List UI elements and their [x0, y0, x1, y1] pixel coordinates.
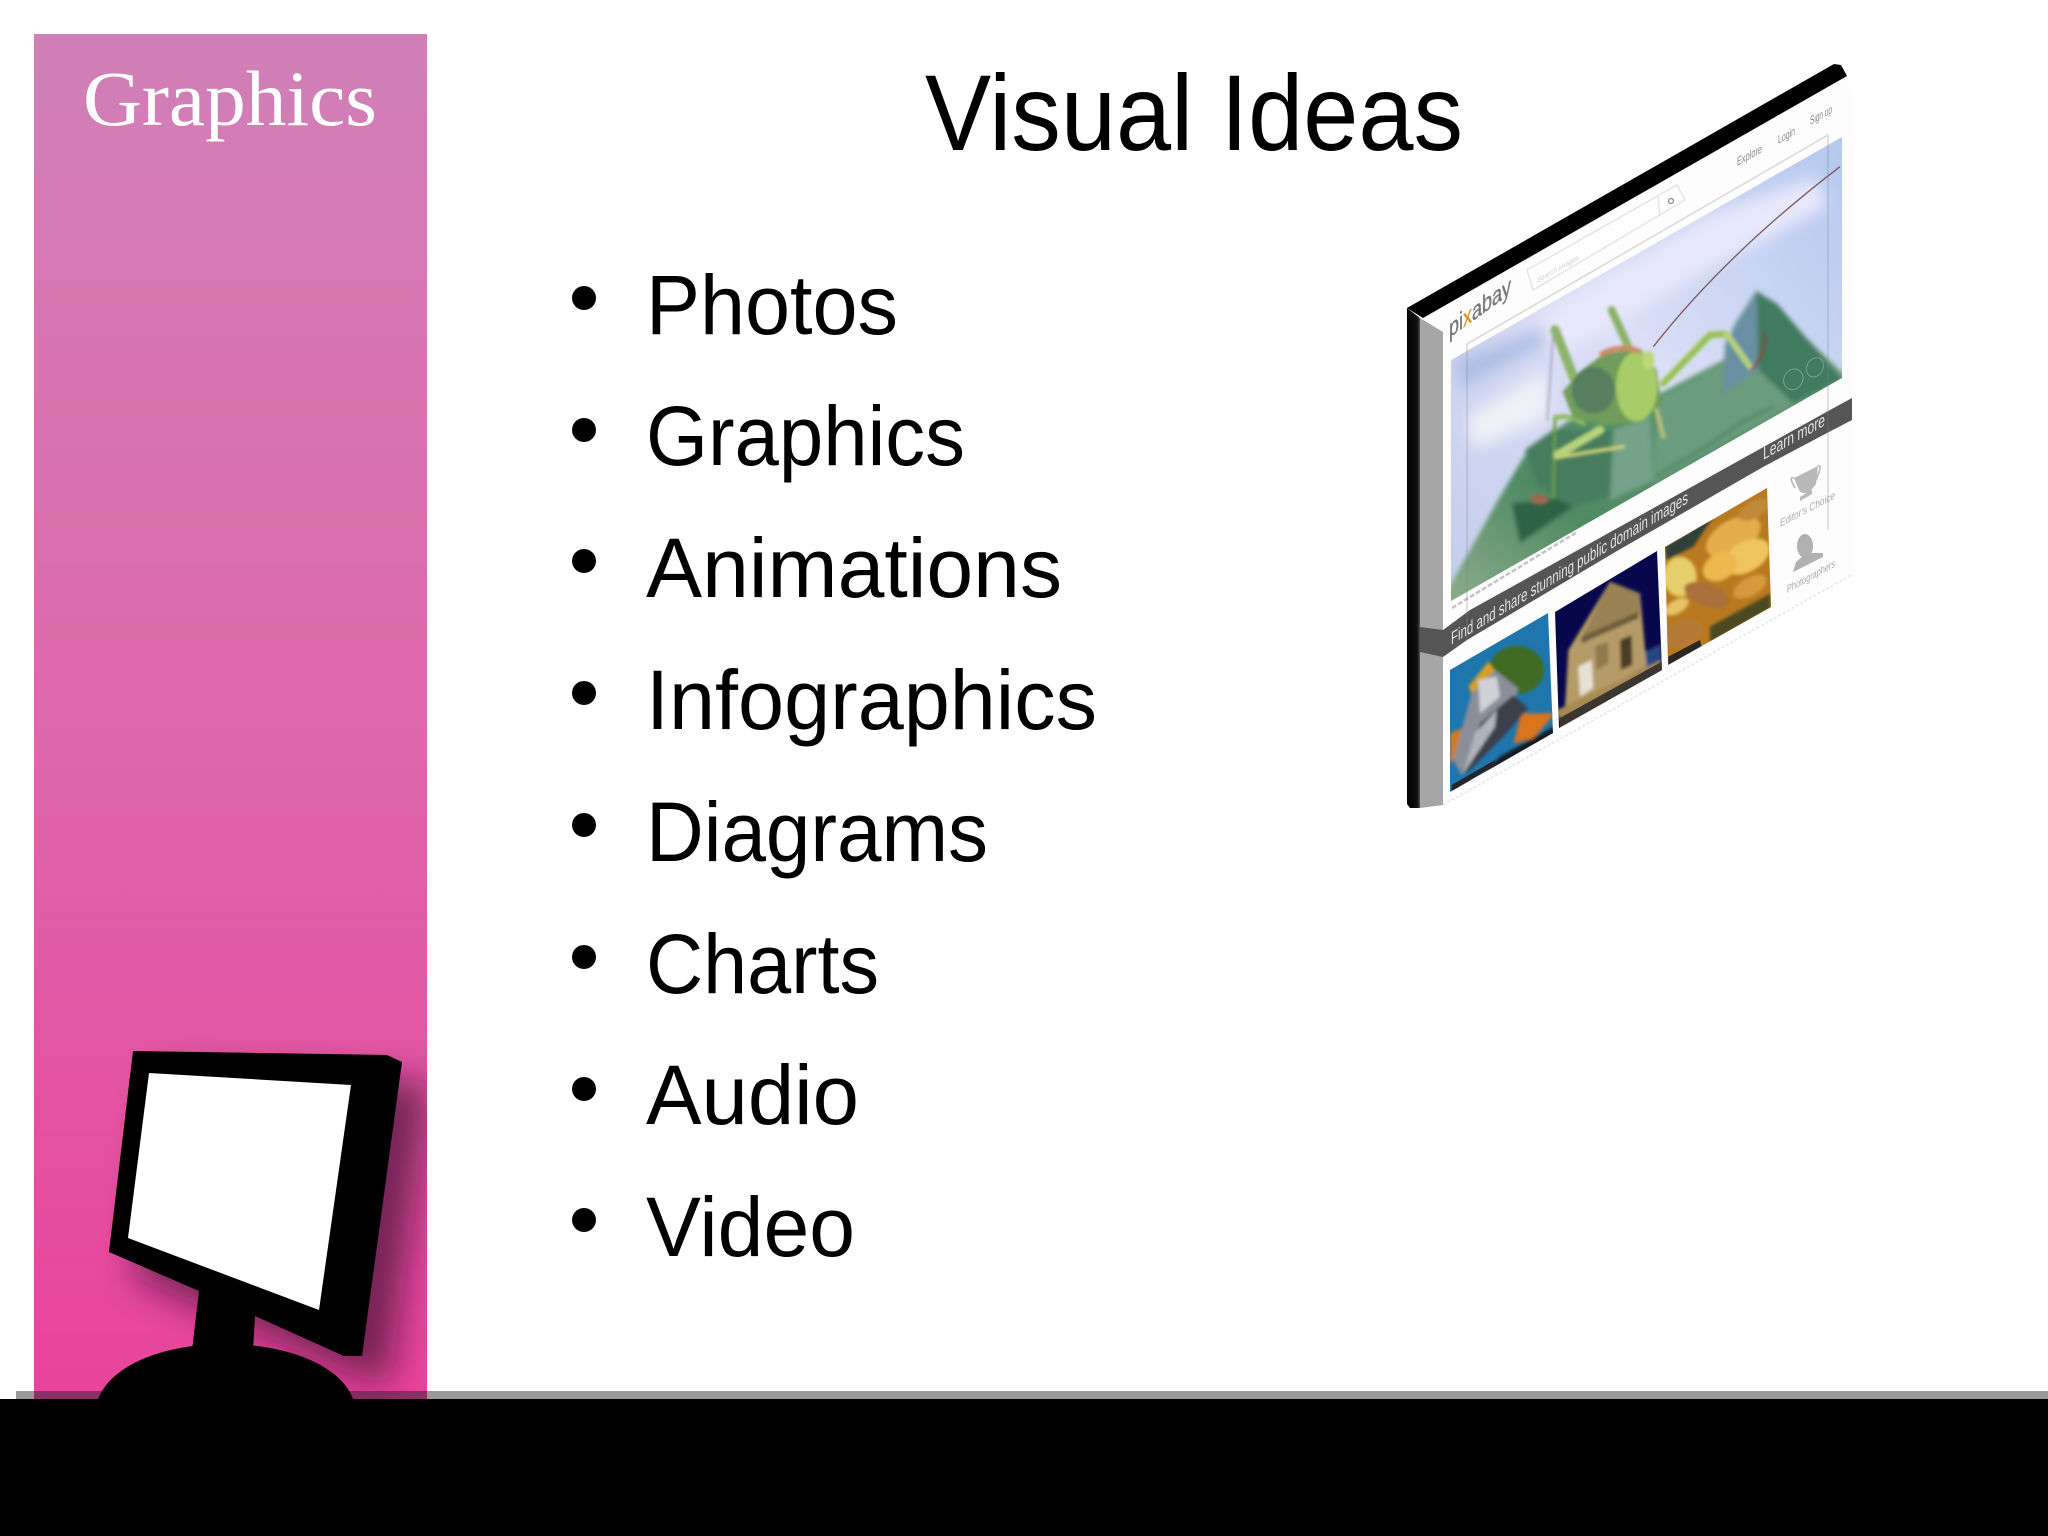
page bottom edge	[1443, 574, 1853, 805]
textured middle leaf	[1653, 363, 1793, 483]
black footer band	[0, 1399, 2048, 1536]
grasshopper body	[1563, 348, 1662, 425]
bullet: Audio: Audio	[646, 1048, 859, 1142]
icon: monitor shadow	[135, 1075, 430, 1382]
image: tilted Pixabay website screenshot	[1407, 64, 1853, 808]
title: Visual Ideas	[925, 52, 1463, 173]
thumbnail: croissants	[1665, 488, 1771, 665]
left edge gray	[1420, 318, 1443, 808]
person icon	[1793, 534, 1823, 572]
leaf shadow	[1525, 430, 1613, 507]
lower leaf	[1440, 290, 1853, 603]
sky clouds	[1453, 177, 1827, 450]
bullet list	[572, 258, 1097, 1274]
search placeholder: Search images	[1537, 252, 1579, 285]
logo: pixabay	[1449, 271, 1511, 343]
hero photo: grasshopper on leaf	[1440, 137, 1853, 603]
overlay frame lines	[1467, 135, 1828, 640]
bullet: Photos: Photos	[646, 258, 898, 352]
grasshopper hind leg	[1557, 430, 1600, 455]
trophy icon	[1791, 466, 1820, 501]
monitor screen	[128, 1073, 351, 1310]
Editor's Choice label: Editor's Choice	[1780, 489, 1835, 530]
pale vertical fold	[1610, 417, 1653, 500]
left edge black	[1407, 308, 1420, 808]
bullet: Video: Video	[646, 1180, 855, 1274]
bullet: Diagrams: Diagrams	[646, 785, 988, 879]
nav links: Explore	[1737, 141, 1762, 169]
page face	[1407, 70, 1853, 808]
nav links	[1737, 102, 1832, 169]
gray floor line	[16, 1391, 2048, 1399]
bullet: Graphics: Graphics	[646, 389, 965, 483]
thumbnail: parrot	[1450, 613, 1553, 792]
banner text: Find and share stunning public domain images	[1451, 487, 1688, 650]
top black edge	[1407, 64, 1847, 318]
monitor base	[98, 1344, 353, 1399]
search box	[1527, 185, 1685, 290]
sidebar heading: Graphics	[83, 55, 377, 142]
thumbnail: triumphal arch	[1553, 548, 1665, 732]
bullet: Charts: Charts	[646, 917, 879, 1011]
grasshopper legs	[1547, 310, 1765, 497]
blue shaded fold	[1723, 292, 1758, 393]
nav links: Sign up	[1810, 102, 1832, 128]
bullet: Infographics: Infographics	[646, 653, 1097, 747]
panel: pink sidebar	[34, 34, 427, 1399]
grasshopper foot	[1530, 494, 1549, 505]
antenna	[1653, 167, 1840, 347]
dark leaf tip	[1757, 292, 1842, 403]
dark banner	[1420, 398, 1852, 657]
Photographers label: Photographers	[1787, 556, 1835, 596]
nav links: Login	[1778, 123, 1795, 147]
bullet: Animations: Animations	[646, 521, 1062, 615]
photo caption line	[1452, 532, 1577, 608]
monitor body and neck	[109, 1051, 402, 1356]
banner link: Learn more	[1763, 409, 1825, 465]
slider arrows	[1783, 357, 1824, 390]
icon: computer monitor	[98, 1051, 402, 1399]
